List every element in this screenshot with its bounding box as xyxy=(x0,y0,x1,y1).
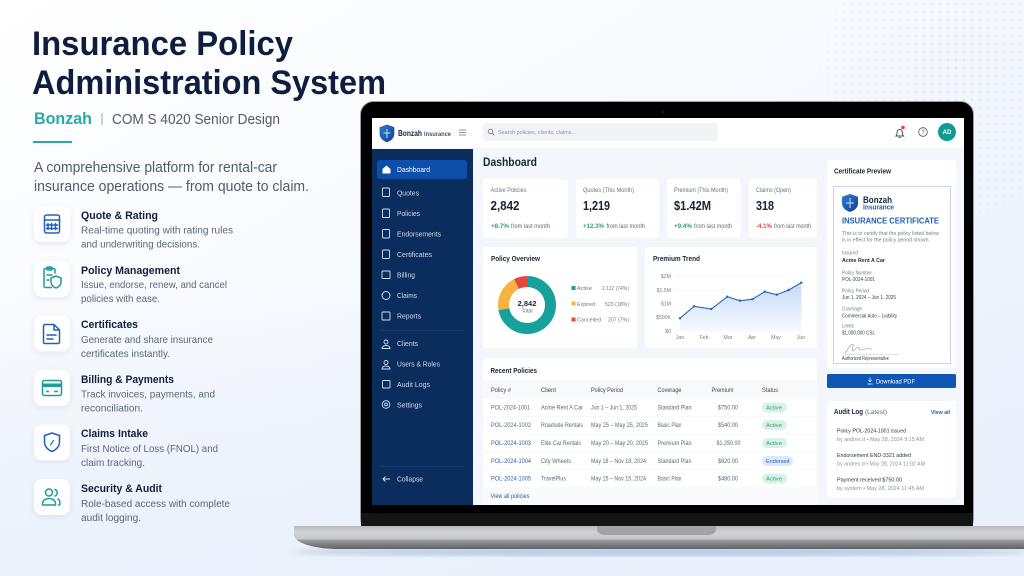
active nav item: Dashboard: Dashboard xyxy=(397,165,430,174)
search box xyxy=(483,123,718,141)
KPI card: Premium: Premium (This Month) xyxy=(674,187,728,194)
app logo: Bonzah xyxy=(398,129,422,138)
certificate document: Coverage xyxy=(842,307,862,313)
icon: calculator xyxy=(44,215,60,233)
user avatar: AD xyxy=(943,130,952,136)
title xyxy=(32,25,386,102)
row 5: Basic Plan xyxy=(658,476,682,482)
KPI card: Claims: -4.1% xyxy=(756,223,772,230)
intro text: insurance operations — from quote to claim. xyxy=(34,179,309,195)
nav item: Certificates: Certificates xyxy=(397,250,432,259)
legend: 2,112 (74%) xyxy=(602,286,629,292)
KPI card: Quotes xyxy=(576,179,659,238)
nav item: Quotes xyxy=(382,188,419,198)
row 5 xyxy=(491,474,787,484)
feature: Certificates: Certificates xyxy=(81,319,138,331)
nav item: Reports: Reports xyxy=(397,312,421,320)
certificate logo xyxy=(842,194,894,212)
certificate document: INSURANCE CERTIFICATE xyxy=(842,216,940,226)
icon: shield xyxy=(44,433,60,452)
table header: Status xyxy=(762,388,778,394)
top bar xyxy=(372,118,964,148)
row 4: Standard Plan xyxy=(658,459,692,465)
dashboard screen xyxy=(372,118,964,505)
KPI card: Active Policies: +8.7% xyxy=(491,223,509,230)
nav item: Claims xyxy=(382,291,417,300)
row 3: $1,250.00 xyxy=(716,441,741,447)
icon: menu xyxy=(459,130,466,135)
page heading: Dashboard xyxy=(483,157,537,169)
row 1: Jun 1 – Jun 1, 2025 xyxy=(591,406,638,412)
laptop xyxy=(290,102,1024,556)
legend xyxy=(572,286,629,324)
certificate document: Policy Number xyxy=(842,271,872,277)
certificate document: POL-2024-1001 xyxy=(842,277,875,283)
certificate document: This is to certify that the policy listed below xyxy=(842,231,939,237)
panel: premium trend xyxy=(645,247,817,348)
nav item: Audit Logs: Audit Logs xyxy=(397,380,430,389)
donut chart xyxy=(504,282,550,328)
sidebar xyxy=(372,149,473,505)
row 5: POL-2024-1005 xyxy=(491,476,532,482)
legend: 523 (18%) xyxy=(605,302,629,308)
audit entry 3: Payment received $750.00 xyxy=(837,477,903,483)
KPI card: Premium: $1.42M xyxy=(674,199,711,213)
KPI card: Quotes: Quotes (This Month) xyxy=(583,187,634,194)
nav item: Certificates xyxy=(382,250,432,259)
line chart: Jun xyxy=(797,335,805,341)
row 2: POL-2024-1002 xyxy=(491,423,532,429)
KPI card: Active Policies xyxy=(483,179,568,238)
row 2: Roadside Rentals xyxy=(541,423,583,429)
KPI card: Quotes: 1,219 xyxy=(583,199,610,213)
KPI card: Active Policies: Active Policies xyxy=(490,187,526,194)
line chart: Jan xyxy=(676,335,684,341)
feature: Certificates: certificates instantly. xyxy=(81,348,170,360)
table header xyxy=(491,388,778,394)
table header: Policy Period xyxy=(591,388,623,394)
audit entry 2: Endorsement END-3321 added xyxy=(837,453,911,459)
line chart: $0 xyxy=(665,329,671,335)
feature: Billing & Payments: reconciliation. xyxy=(81,402,143,414)
row 1: Standard Plan xyxy=(658,406,692,412)
feature: Quote & Rating: Real-time quoting with rating rules xyxy=(81,224,233,236)
row 5: Active xyxy=(766,476,782,482)
row 3: May 20 – May 20, 2025 xyxy=(591,441,649,447)
certificate document: is in effect for the policy period shown. xyxy=(842,238,930,244)
table header: Premium xyxy=(712,388,734,394)
row 4: POL-2024-1004 xyxy=(491,459,532,465)
subtitle: Bonzah and course: COM S 4020 Senior Design xyxy=(112,112,280,128)
feature: Security & Audit xyxy=(34,479,230,524)
line chart: $2M xyxy=(661,274,671,280)
row 2: Basic Plan xyxy=(658,423,682,429)
feature: Certificates: Generate and share insurance xyxy=(81,334,213,346)
title: Insurance Policy xyxy=(32,25,293,63)
nav item: Collapse xyxy=(383,474,423,484)
KPI card: Claims: Claims (Open) xyxy=(756,187,791,194)
row 1: Active xyxy=(766,406,782,412)
row 4: City Wheels xyxy=(541,459,571,465)
certificate logo: Insurance xyxy=(863,204,894,212)
panel: recent policies table: Recent Policies xyxy=(490,366,537,375)
intro text xyxy=(34,160,309,195)
audit entry 1 xyxy=(837,429,925,443)
audit entry 2: by andres.d • May 28, 2024 11:02 AM xyxy=(837,462,925,468)
row 3 xyxy=(491,438,787,448)
audit entry 1: Policy POL-2024-1001 issued xyxy=(837,429,906,435)
subtitle: Bonzah and course: Bonzah xyxy=(34,109,92,128)
row 4: Endorsed xyxy=(766,459,790,465)
feature: Certificates xyxy=(34,316,213,360)
feature: Policy Management: policies with ease. xyxy=(81,293,160,305)
panel: audit log: Audit Log xyxy=(834,409,863,416)
line chart: Feb xyxy=(700,335,709,341)
feature: Policy Management xyxy=(34,261,227,305)
certificate document: Acme Rent A Car xyxy=(842,258,886,264)
KPI card: Quotes: from last month xyxy=(606,223,645,230)
feature: Claims Intake: Claims Intake xyxy=(81,428,148,440)
panel: policy overview: Policy Overview xyxy=(491,254,540,263)
title: Administration System xyxy=(32,64,386,102)
nav item: Users & Roles: Users & Roles xyxy=(397,360,440,368)
subtitle: Bonzah and course xyxy=(34,109,280,128)
legend: Cancelled xyxy=(577,318,601,324)
nav item: Billing xyxy=(382,270,415,280)
panel: policy overview xyxy=(483,247,637,348)
panel: certificate preview: Certificate Preview xyxy=(834,166,891,176)
certificate document: Policy Period xyxy=(842,288,869,294)
button: download PDF: Download PDF xyxy=(876,378,915,386)
link: view all policies: View all policies xyxy=(490,494,530,500)
feature: Policy Management: Issue, endorse, renew, and cancel xyxy=(81,279,227,291)
table header: Client xyxy=(541,388,556,394)
row 5: TravelPlus xyxy=(541,476,566,482)
legend: Active xyxy=(577,286,592,292)
feature: Claims Intake: claim tracking. xyxy=(81,457,145,469)
icon: document xyxy=(44,324,60,344)
nav item: Users & Roles xyxy=(382,360,440,369)
KPI card: Premium: +9.4% xyxy=(674,223,692,230)
row 5: May 15 – Nov 15, 2024 xyxy=(591,476,647,482)
feature: Billing & Payments xyxy=(34,370,215,414)
nav item: Reports xyxy=(382,312,421,320)
icon: clipboard with shield xyxy=(44,267,61,288)
row 3: POL-2024-1003 xyxy=(491,441,532,447)
row 5: $480.00 xyxy=(718,476,739,482)
row 1: $750.00 xyxy=(718,406,739,412)
active nav item: Dashboard xyxy=(377,160,467,179)
table header: Coverage xyxy=(658,388,682,394)
row 3: Active xyxy=(766,441,782,447)
row 2: $540.00 xyxy=(718,423,739,429)
legend: Expired xyxy=(577,302,595,308)
KPI card: Claims: from last month xyxy=(774,223,811,230)
feature: Claims Intake: First Notice of Loss (FNOL) and xyxy=(81,443,218,455)
feature: Security & Audit: Role-based access with complete xyxy=(81,498,230,510)
certificate document: Insured xyxy=(842,250,858,256)
panel: audit log: View all xyxy=(931,410,950,416)
feature: Quote & Rating: and underwriting decisions. xyxy=(81,238,200,250)
KPI card: Claims: 318 xyxy=(756,199,774,213)
panel: premium trend: Premium Trend xyxy=(653,254,700,263)
row 2: May 25 – May 25, 2025 xyxy=(591,423,649,429)
nav item: Collapse: Collapse xyxy=(397,474,423,484)
row 1: POL-2024-1001 xyxy=(491,406,531,412)
line chart: $1.5M xyxy=(657,288,671,294)
icon: users xyxy=(42,489,60,505)
app logo: Insurance xyxy=(424,132,452,138)
line chart: Mar xyxy=(724,335,733,341)
nav item: Policies xyxy=(382,209,420,218)
feature: Billing & Payments: Track invoices, payments, and xyxy=(81,388,215,400)
certificate document: $1,000,000 CSL xyxy=(842,330,875,336)
audit entry 1: by andres.d • May 28, 2024 9:15 AM xyxy=(837,437,925,443)
KPI card: Premium: from last month xyxy=(694,223,732,230)
KPI card: Active Policies: from last month xyxy=(511,223,550,230)
row 4: $820.00 xyxy=(718,459,739,465)
certificate document xyxy=(834,186,950,364)
nav item: Clients xyxy=(382,339,418,348)
feature: Claims Intake xyxy=(34,424,218,469)
panel: audit log: (Latest) xyxy=(865,409,887,416)
intro text: A comprehensive platform for rental-car xyxy=(34,160,277,176)
KPI card: Quotes: +12.3% xyxy=(583,223,604,230)
row 1 xyxy=(491,402,787,412)
button: download PDF xyxy=(827,374,956,388)
donut chart: 2,842 xyxy=(518,299,536,308)
icon: help xyxy=(919,128,927,136)
row 4: May 18 – Nov 18, 2024 xyxy=(591,459,647,465)
row 2: Active xyxy=(766,423,782,429)
row 3: Premium Plan xyxy=(658,441,692,447)
laptop base xyxy=(294,526,1024,549)
nav item: Audit Logs xyxy=(382,380,430,389)
feature: Security & Audit: audit logging. xyxy=(81,512,141,524)
feature: Policy Management: Policy Management xyxy=(81,265,180,277)
feature: Security & Audit: Security & Audit xyxy=(81,483,162,495)
row 2 xyxy=(491,420,787,430)
line chart xyxy=(656,274,805,341)
certificate logo: Bonzah xyxy=(863,195,892,205)
audit entry 3: by system • May 28, 2024 11:45 AM xyxy=(837,486,925,492)
nav item: Quotes: Quotes xyxy=(397,188,419,198)
line chart: $1M xyxy=(661,302,671,308)
laptop lid and bezel xyxy=(360,102,974,532)
certificate document: Commercial Auto – Liability xyxy=(842,313,897,319)
panel: audit log xyxy=(827,401,956,498)
row 1: Acme Rent A Car xyxy=(541,406,583,412)
icon: credit card xyxy=(42,380,62,396)
KPI card: Premium xyxy=(667,179,740,238)
panel: recent policies table xyxy=(483,358,817,505)
nav item: Billing: Billing xyxy=(397,270,415,280)
app logo xyxy=(380,125,452,142)
user avatar xyxy=(938,123,956,141)
search box: Search policies, clients, claims... xyxy=(498,130,576,136)
nav item: Settings: Settings xyxy=(397,400,422,410)
row 3: Elite Car Rentals xyxy=(541,441,581,447)
KPI card: Claims xyxy=(749,179,817,238)
feature: Billing & Payments: Billing & Payments xyxy=(81,374,174,386)
donut chart: Total xyxy=(522,308,532,314)
line chart: Apr xyxy=(748,335,756,341)
certificate document: Jun 1, 2024 – Jun 1, 2025 xyxy=(842,295,896,301)
row 4 xyxy=(491,456,793,466)
certificate document: Limits xyxy=(842,324,854,330)
nav item: Clients: Clients xyxy=(397,339,418,348)
legend: 207 (7%) xyxy=(608,318,629,324)
nav item: Policies: Policies xyxy=(397,209,420,218)
panel: certificate preview xyxy=(827,160,956,368)
line chart: $500K xyxy=(656,315,672,321)
icon: help: ? xyxy=(921,130,925,136)
icon: notification bell xyxy=(896,126,905,138)
feature: Quote & Rating: Quote & Rating xyxy=(81,210,158,222)
nav item: Settings xyxy=(382,400,422,410)
nav item: Claims: Claims xyxy=(397,291,417,300)
signature xyxy=(845,344,872,353)
audit entry 3 xyxy=(837,477,925,492)
line chart: May xyxy=(771,335,781,341)
table header: Policy # xyxy=(491,388,512,394)
feature: Quote & Rating xyxy=(34,206,233,250)
audit entry 2 xyxy=(837,453,925,468)
certificate document: Authorized Representative xyxy=(842,356,889,362)
nav item: Endorsements: Endorsements xyxy=(397,230,441,238)
KPI card: Active Policies: 2,842 xyxy=(490,199,520,213)
